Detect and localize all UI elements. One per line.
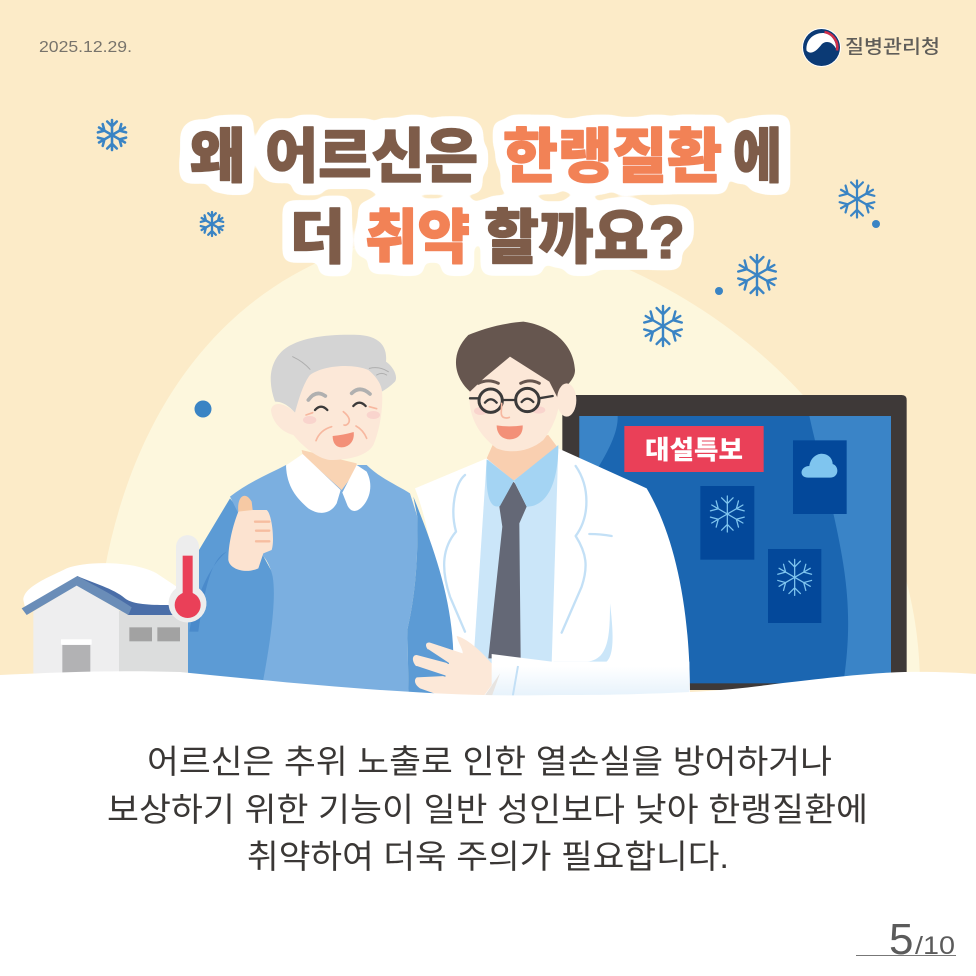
monitor screen and frame [562, 395, 907, 690]
logo emblem [802, 28, 841, 67]
title: 왜 [190, 124, 245, 190]
background hill [94, 228, 920, 690]
title: 한랭질환 [503, 124, 722, 190]
snowflakes and dots [97, 120, 880, 418]
dot [872, 220, 880, 228]
snow ground [0, 671, 976, 976]
thermometer [168, 535, 206, 622]
title: 어르신은 [265, 124, 478, 190]
dot [194, 400, 212, 418]
doctor's hand and sleeve [413, 636, 689, 697]
snowflake [200, 212, 224, 236]
snowflake [97, 120, 127, 150]
logo wordmark: 질병관리청 [845, 36, 940, 58]
snowflake [736, 255, 778, 295]
older adult giving thumbs up [188, 335, 453, 697]
title: 취약 [365, 205, 470, 271]
title: 에 [733, 124, 782, 190]
heavy snow warning label: 대설특보 [645, 435, 743, 465]
monitor showing heavy snow warning [562, 395, 907, 690]
page number [856, 915, 956, 964]
title: 더 [290, 205, 345, 271]
page number: 5 [889, 915, 913, 964]
body text [107, 743, 868, 875]
date: 2025.12.29. [39, 39, 132, 56]
body text: 어르신은 추위 노출로 인한 열손실을 방어하거나 [147, 743, 832, 780]
body text: 취약하여 더욱 주의가 필요합니다. [247, 838, 729, 875]
dot [715, 287, 723, 295]
page number: /10 [915, 932, 955, 960]
house with snowy roof [22, 563, 189, 673]
logo: Korea Disease Control and Prevention Agency [802, 28, 940, 67]
snowflake [838, 180, 876, 218]
snowflake [642, 306, 684, 346]
body text: 보상하기 위한 기능이 일반 성인보다 낮아 한랭질환에 [107, 791, 868, 828]
title [190, 124, 782, 271]
doctor [415, 322, 690, 695]
title: 할까요? [484, 205, 685, 271]
